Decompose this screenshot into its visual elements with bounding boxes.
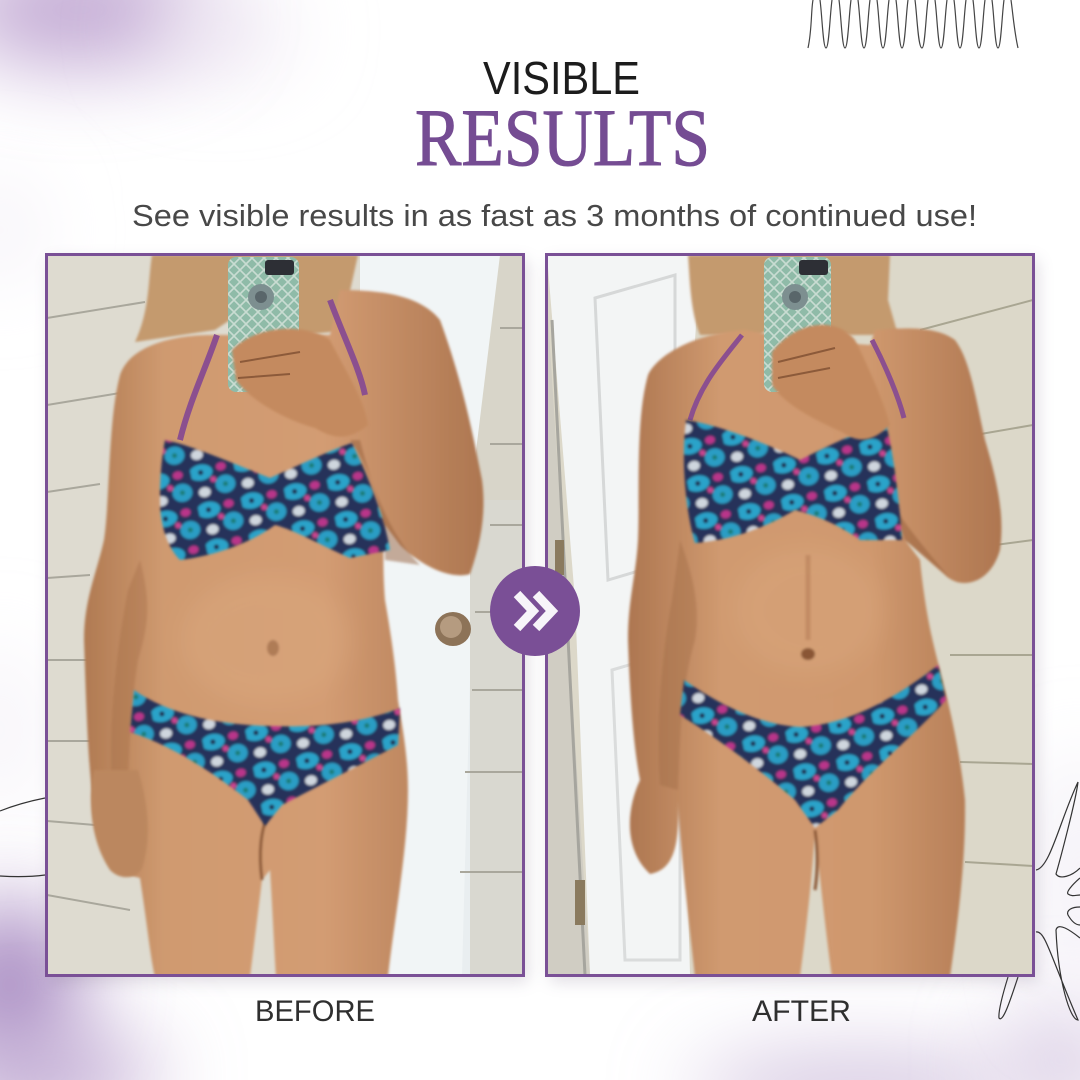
straps [690, 335, 904, 420]
door knob [435, 612, 471, 646]
navel [267, 640, 279, 656]
phone [764, 257, 831, 392]
bikini top [160, 440, 390, 560]
figure: body [84, 290, 484, 977]
label: before: BEFORE [255, 995, 375, 1028]
bikini top [684, 420, 902, 543]
arm shadow [112, 564, 147, 770]
title line: results: RESULTS [415, 92, 710, 183]
straps [180, 300, 365, 440]
hair [688, 255, 898, 335]
panel shadows [50, 260, 1038, 982]
after frame [546, 254, 1034, 976]
before frame [46, 254, 524, 976]
belly highlight [266, 638, 280, 658]
hand on phone [232, 329, 368, 437]
decoration: curved lines left [0, 798, 45, 877]
title line: visible: VISIBLE [483, 52, 640, 104]
bikini bottom [680, 665, 946, 828]
panel: after photo [546, 254, 1034, 977]
decoration: zigzag line top right [808, 0, 1018, 48]
bikini bottom [130, 690, 400, 826]
title [415, 52, 710, 183]
abdomen highlight [733, 545, 883, 675]
hair [135, 255, 358, 342]
figure: body [628, 328, 1001, 977]
phone [228, 257, 299, 392]
decoration: burst outline bottom right [999, 782, 1080, 1020]
label: after: AFTER [752, 995, 851, 1028]
left hand [91, 770, 148, 877]
panel: before photo [46, 254, 524, 977]
wall and door background [547, 255, 1033, 975]
hand on phone [772, 325, 890, 439]
wall and door background [47, 255, 523, 975]
left arm shadow [659, 540, 697, 790]
subtitle: See visible results in as fast as 3 months of continued use! [132, 198, 977, 233]
arrow badge [490, 566, 580, 656]
